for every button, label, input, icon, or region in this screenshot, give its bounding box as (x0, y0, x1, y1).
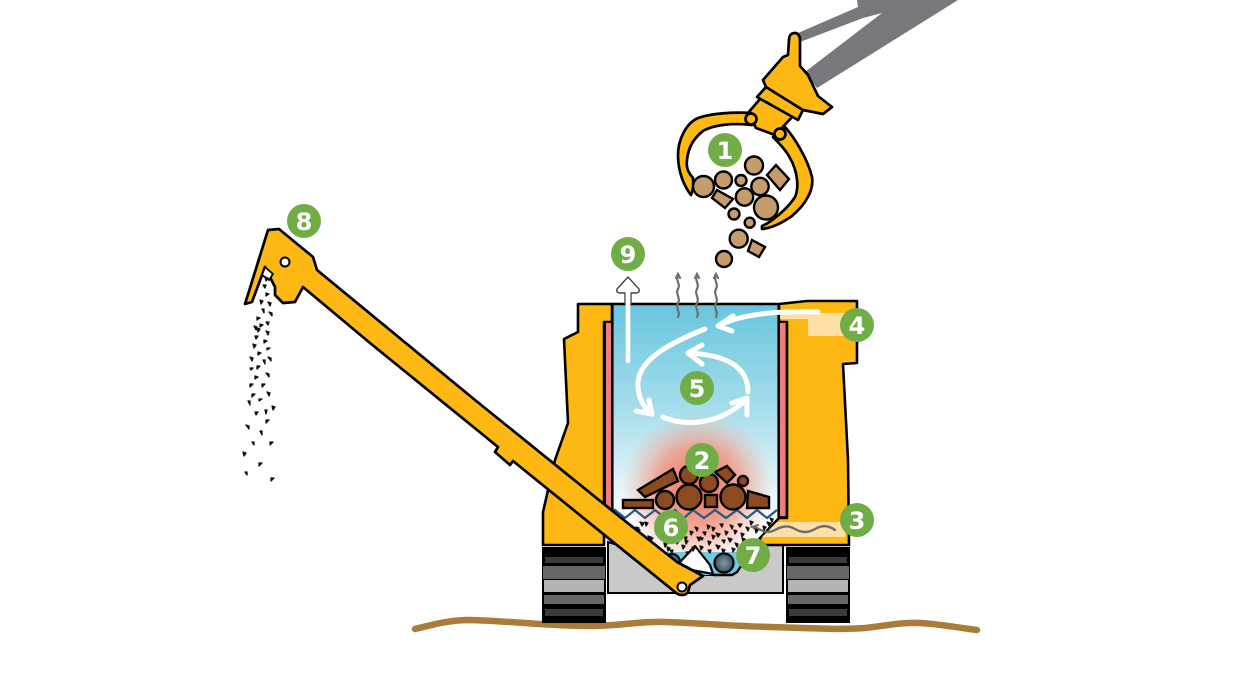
badge 8: 8 (296, 208, 312, 236)
biochar stream (243, 277, 275, 481)
collar (757, 87, 803, 120)
left refractory wall (605, 322, 612, 510)
swirl arrow bottom (663, 398, 747, 423)
badge 6: 6 (663, 514, 679, 542)
discharge outlet (262, 267, 273, 280)
conveyor head pivot (280, 258, 290, 266)
badge 2 (685, 443, 719, 477)
badge 1 (708, 133, 742, 167)
ground (415, 620, 977, 630)
right refractory wall (779, 322, 786, 517)
badge 4 (840, 308, 874, 342)
conveyor pivot (678, 582, 686, 592)
falling ash particles (636, 518, 773, 556)
badge 5: 5 (689, 375, 705, 403)
water (666, 552, 740, 575)
chamber side lines (612, 304, 778, 518)
badge 2: 2 (694, 447, 710, 475)
right track (786, 547, 850, 623)
blue gas gradient (612, 304, 779, 510)
badge 3 (840, 503, 874, 537)
grapple neck (748, 99, 795, 135)
badge 9: 9 (620, 241, 636, 269)
badge 5 (680, 371, 714, 405)
grate chevrons (612, 510, 777, 518)
smoke lines (676, 274, 718, 317)
badge 8 (287, 204, 321, 238)
badge 1: 1 (717, 137, 733, 165)
right body (760, 301, 857, 545)
right claw (762, 127, 812, 229)
white ash pile (680, 546, 713, 574)
badge 9 (611, 237, 645, 271)
ash box (608, 540, 783, 593)
badge 7: 7 (745, 542, 761, 570)
logs (623, 466, 769, 510)
combustion chamber (612, 304, 779, 580)
ash ball (714, 554, 734, 572)
chamber trough outline (612, 304, 779, 575)
pivots (746, 114, 786, 140)
left ash ball (664, 554, 680, 570)
badge 3: 3 (849, 507, 865, 535)
air inlet arrow (718, 312, 818, 331)
air inlet 3 (762, 522, 845, 537)
heat glow (626, 416, 770, 552)
swirl arrow left (636, 329, 705, 414)
left body (543, 304, 612, 545)
left claw (678, 113, 752, 195)
badge 7 (736, 538, 770, 572)
badge 4: 4 (849, 312, 865, 340)
wood chips in grapple (693, 156, 789, 267)
gas flow arrows (636, 312, 818, 423)
grapple (678, 33, 832, 229)
air arrow 3 (752, 525, 835, 532)
exhaust arrow (617, 277, 639, 361)
air inlet 4 (780, 313, 845, 336)
badge 6 (654, 510, 688, 544)
diagram: machine cross-section (242, 0, 980, 634)
grapple arm (798, 0, 958, 88)
swirl arrow top (688, 345, 748, 392)
conveyor (245, 229, 703, 595)
left track (542, 547, 606, 623)
grapple head (763, 33, 832, 114)
